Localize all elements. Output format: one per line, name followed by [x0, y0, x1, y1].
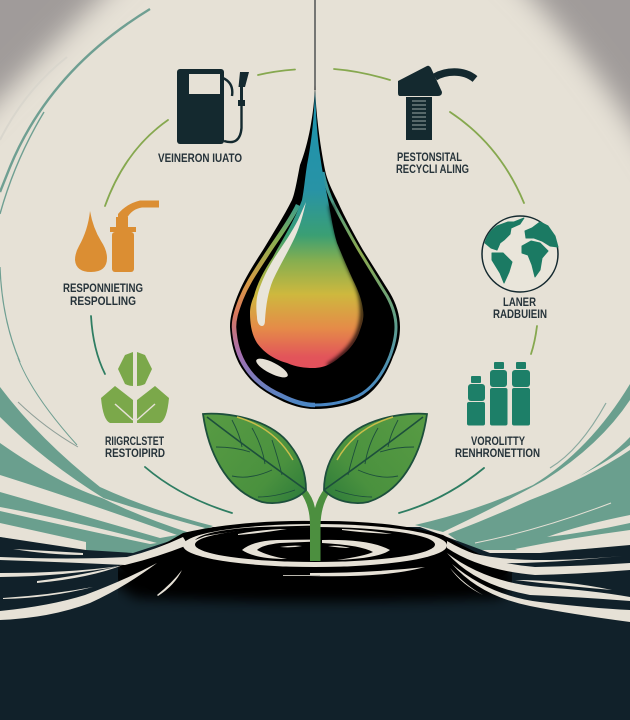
icon: globe	[482, 216, 558, 292]
right rainbow rim	[315, 172, 396, 405]
icon: fuel nozzle	[398, 66, 475, 140]
label: pestonsital recycling: RECYCLI ALING	[396, 162, 469, 176]
teal swooshes right	[415, 384, 630, 553]
label: pestonsital recycling	[396, 150, 469, 176]
label: laner radbuiein: RADBUIEIN	[493, 307, 547, 321]
icon: fuel pump	[177, 69, 249, 144]
lower highlight	[254, 355, 290, 381]
oil drop	[230, 85, 400, 409]
teal swooshes left	[0, 387, 213, 556]
stem	[300, 488, 330, 561]
mound ripples	[183, 524, 447, 576]
icon: bottles	[467, 362, 530, 426]
label: vorolitty renhronettion	[455, 434, 540, 460]
label: laner radbuiein: LANER	[503, 295, 536, 309]
label: responnieting respolling	[63, 281, 143, 308]
label: vorolitty renhronettion: RENHRONETTION	[455, 446, 540, 460]
right leaf	[324, 414, 427, 503]
left oil streaks	[0, 537, 188, 620]
left rainbow rim	[234, 205, 315, 405]
label: responnieting respolling: RESPONNIETING	[63, 281, 143, 295]
left leaf	[203, 414, 306, 503]
sweeping arcs	[0, 9, 606, 468]
label: responnieting respolling: RESPOLLING	[70, 294, 136, 308]
oil ground	[0, 521, 630, 720]
oil mound	[118, 566, 512, 607]
label: pestonsital recycling: PESTONSITAL	[397, 150, 462, 164]
drop hanging line	[314, 0, 316, 90]
drop outline	[230, 85, 400, 409]
label: vorolitty renhronettion: VOROLITTY	[471, 434, 525, 448]
highlight	[256, 202, 306, 326]
core shadow	[328, 205, 363, 366]
label: riigrclstet restoipird: RIIGRCLSTET	[105, 434, 164, 448]
connector arcs	[91, 69, 537, 513]
label: riigrclstet restoipird	[105, 434, 165, 460]
icon: orange drop and bottle	[75, 200, 159, 272]
label: riigrclstet restoipird: RESTOIPIRD	[105, 446, 165, 460]
label: laner radbuiein	[493, 295, 547, 321]
icon: green leaves	[101, 352, 169, 423]
label: veineron iuato: VEINERON IUATO	[158, 151, 242, 165]
right oil streaks	[447, 541, 630, 622]
seedling	[203, 414, 427, 561]
mound silhouette	[118, 521, 512, 590]
drop colour core	[250, 90, 363, 368]
